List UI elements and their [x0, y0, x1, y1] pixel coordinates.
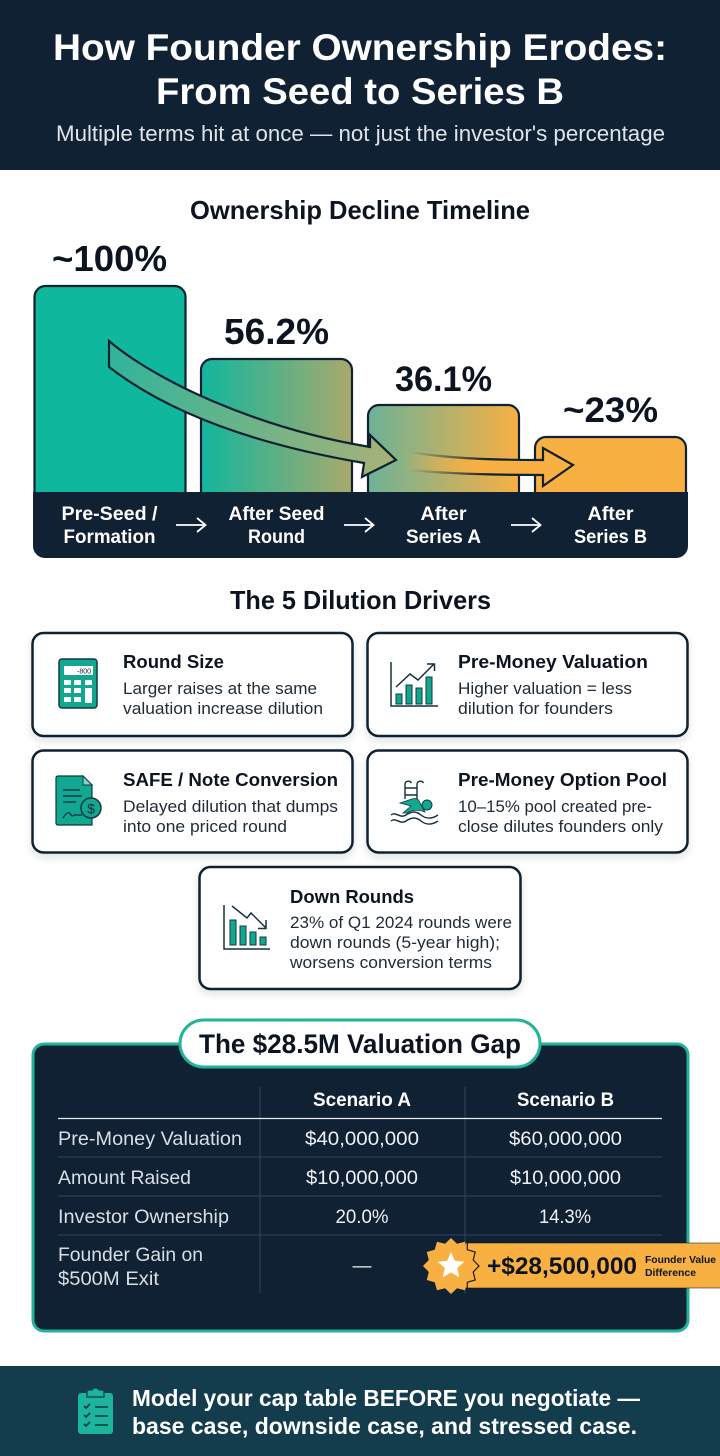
row: investor ownership: 14.3%	[539, 1206, 591, 1228]
card text	[123, 769, 338, 836]
row: investor ownership: 20.0%	[336, 1206, 388, 1228]
title	[53, 27, 667, 112]
row: pre-money valuation: $40,000,000	[305, 1128, 419, 1150]
footer banner	[0, 1366, 720, 1456]
card text: Down Rounds	[290, 886, 414, 907]
call to action: base case, downside case, and stressed case.	[132, 1413, 637, 1439]
card text: dilution for founders	[458, 699, 613, 718]
row: founder gain: $500M Exit	[58, 1268, 160, 1290]
callout: founder value difference: Founder Value	[645, 1254, 716, 1266]
label: after series A: After	[420, 504, 467, 525]
row: founder gain: —	[352, 1255, 372, 1277]
label band	[33, 492, 688, 558]
arrow: step 1	[176, 518, 206, 532]
bar: after series A	[368, 405, 519, 495]
row: investor ownership	[58, 1206, 591, 1228]
decline arrow: small	[405, 448, 573, 486]
label: pre-seed: Pre-Seed /	[62, 504, 158, 525]
row: amount raised: Amount Raised	[58, 1167, 191, 1189]
label: pre-seed: Formation	[64, 527, 156, 548]
card text: Delayed dilution that dumps	[123, 797, 338, 816]
label: after series A: Series A	[406, 527, 481, 548]
icon: falling chart	[224, 905, 270, 949]
table grid	[58, 1087, 662, 1293]
row: founder gain	[58, 1244, 372, 1290]
card text: Pre-Money Option Pool	[458, 769, 667, 790]
call to action	[132, 1385, 640, 1439]
card text: valuation increase dilution	[123, 699, 323, 718]
table title pill: The $28.5M Valuation Gap	[199, 1029, 521, 1059]
title: From Seed to Series B	[156, 71, 564, 112]
card text	[458, 651, 648, 718]
label: after series B: After	[588, 504, 634, 525]
row: pre-money valuation	[58, 1128, 622, 1150]
bar: after seed	[201, 359, 352, 495]
table title pill	[180, 1020, 540, 1067]
call to action: Model your cap table BEFORE you negotiate —	[132, 1385, 640, 1411]
header banner	[0, 0, 720, 170]
icon: clipboard checklist	[78, 1388, 113, 1434]
card text: 23% of Q1 2024 rounds were	[290, 913, 512, 932]
row: pre-money valuation: Pre-Money Valuation	[58, 1128, 242, 1150]
table header: Scenario A	[313, 1090, 411, 1111]
arrow: step 3	[511, 518, 540, 532]
value: 36.1%: 36.1%	[395, 360, 492, 399]
row: investor ownership: Investor Ownership	[58, 1206, 229, 1228]
table header	[313, 1090, 614, 1111]
arrow: step 2	[344, 518, 374, 532]
icon: calculator	[59, 659, 97, 708]
card text	[458, 769, 667, 836]
card text: Round Size	[123, 651, 224, 672]
card text: 10–15% pool created pre-	[458, 797, 652, 816]
value: ~100%: ~100%	[52, 238, 167, 279]
icon: swimmer	[391, 781, 438, 824]
card text: into one priced round	[123, 817, 287, 836]
bar: pre-seed	[34, 286, 186, 495]
icon: star badge	[423, 1238, 479, 1294]
icon: rising chart	[391, 662, 438, 706]
callout: founder value difference	[423, 1238, 720, 1294]
icon: calculator: -800	[77, 668, 91, 676]
card text: close dilutes founders only	[458, 817, 664, 836]
callout: founder value difference: +$28,500,000	[487, 1253, 637, 1280]
panel: ownership decline timeline	[33, 195, 688, 558]
card text	[289, 886, 512, 972]
row: amount raised	[58, 1167, 621, 1189]
value: 56.2%: 56.2%	[224, 311, 329, 352]
card text: Higher valuation = less	[458, 679, 632, 698]
card: pre-money option pool	[368, 750, 688, 852]
card: down rounds	[200, 867, 520, 989]
label: after series B: Series B	[574, 527, 647, 548]
row: pre-money valuation: $60,000,000	[509, 1128, 622, 1150]
card: pre-money valuation	[368, 633, 688, 736]
row: amount raised: $10,000,000	[510, 1167, 621, 1189]
label: after seed: Round	[248, 527, 305, 548]
card text: Larger raises at the same	[123, 679, 317, 698]
card text: SAFE / Note Conversion	[123, 769, 338, 790]
title: How Founder Ownership Erodes:	[53, 27, 667, 68]
icon: document with dollar	[56, 776, 101, 825]
panel: valuation gap table	[33, 1020, 720, 1331]
card: SAFE note conversion	[32, 750, 352, 852]
card: round size	[32, 633, 352, 736]
timeline heading: Ownership Decline Timeline	[190, 195, 530, 225]
decline arrow: large curved	[109, 341, 396, 477]
table header: Scenario B	[517, 1090, 614, 1111]
value: ~23%: ~23%	[563, 391, 658, 430]
card text: down rounds (5-year high);	[290, 933, 500, 952]
label: after series A	[406, 504, 481, 548]
drivers heading: The 5 Dilution Drivers	[230, 585, 491, 615]
panel: dilution drivers	[32, 585, 688, 989]
label: after series B	[574, 504, 647, 548]
subtitle: Multiple terms hit at once — not just the investor's percentage	[56, 121, 665, 146]
bar: after series B	[535, 437, 686, 495]
label: after seed: After Seed	[228, 504, 324, 525]
card text: Pre-Money Valuation	[458, 651, 648, 672]
label: pre-seed	[62, 504, 158, 548]
icon: document with dollar: $	[87, 800, 95, 816]
card text: worsens conversion terms	[289, 953, 492, 972]
card text	[123, 651, 323, 718]
row: founder gain: Founder Gain on	[58, 1244, 203, 1266]
callout: founder value difference: Difference	[645, 1267, 696, 1279]
label: after seed	[228, 504, 324, 548]
row: amount raised: $10,000,000	[306, 1167, 418, 1189]
